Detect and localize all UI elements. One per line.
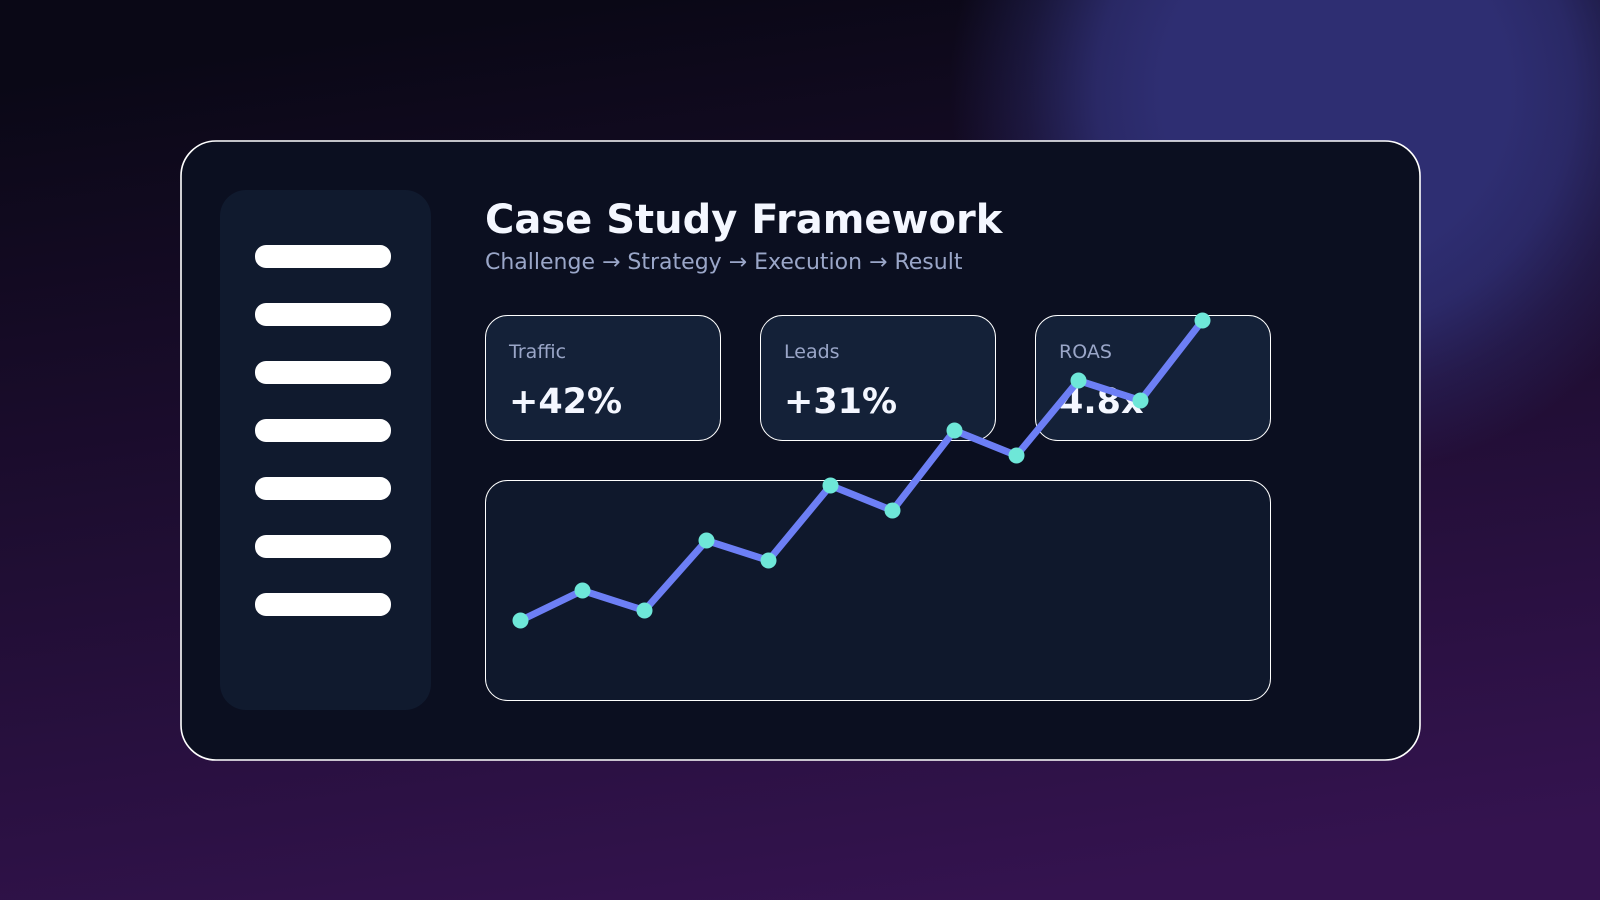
sidebar item 3 <box>255 361 391 384</box>
KPI label: ROAS: ROAS <box>1059 341 1112 363</box>
KPI card: traffic <box>486 316 720 440</box>
chart line <box>520 320 1202 620</box>
KPI value: leads: +31% <box>784 382 897 422</box>
KPI label: traffic: Traffic <box>508 341 566 363</box>
panel: main card <box>181 141 1420 760</box>
KPI value: traffic: +42% <box>509 382 622 422</box>
KPI label: leads: Leads <box>784 341 840 363</box>
sidebar item 4 <box>255 419 391 442</box>
KPI card: leads <box>760 316 996 440</box>
KPI card: ROAS <box>1036 316 1270 440</box>
sidebar item 7 <box>255 593 391 616</box>
KPI value: ROAS: 4.8x <box>1059 382 1144 422</box>
panel: chart <box>486 480 1270 700</box>
background glow <box>900 0 1600 500</box>
chart points <box>512 312 1210 628</box>
sidebar item 2 <box>255 303 391 326</box>
subtitle: Challenge → Strategy → Execution → Result <box>485 250 963 275</box>
line chart <box>512 312 1210 628</box>
sidebar item 5 <box>255 477 391 500</box>
sidebar item 6 <box>255 535 391 558</box>
title: Case Study Framework <box>485 197 1004 243</box>
panel: sidebar <box>220 190 431 710</box>
sidebar item 1 <box>255 245 391 268</box>
